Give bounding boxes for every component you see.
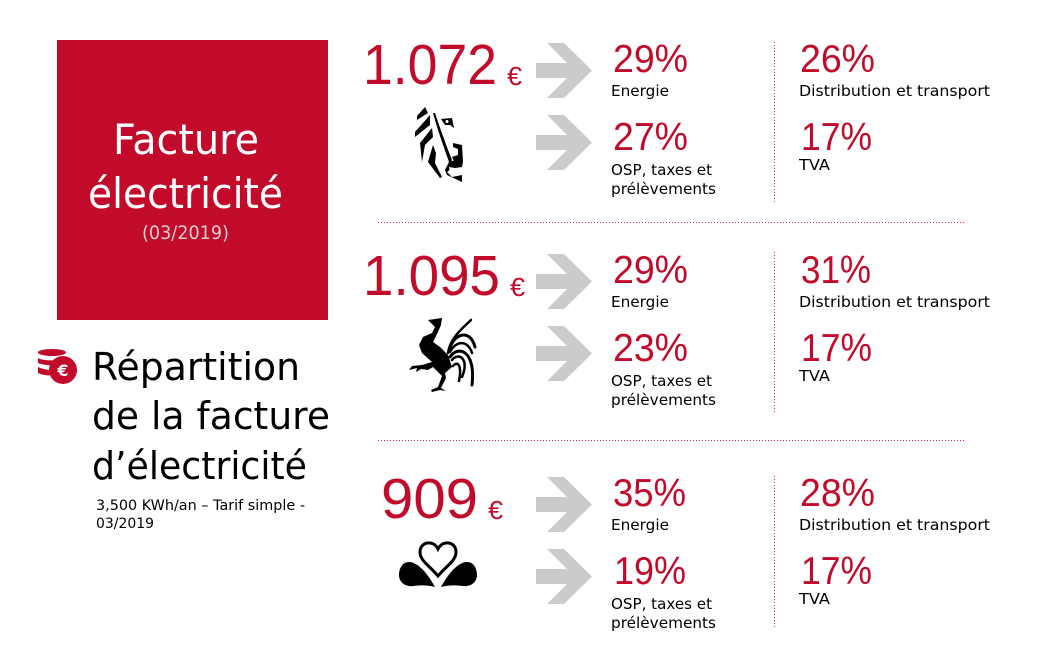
stat: Energie: 29% (613, 38, 688, 81)
stat: OSP taxes: prélèvements (611, 180, 716, 198)
stat: OSP taxes: 19% (614, 550, 686, 593)
stat: Distribution (799, 249, 990, 311)
panel: title box (57, 40, 328, 320)
stat: Energie (611, 38, 688, 100)
stat: Distribution: 28% (800, 472, 875, 515)
arrow (536, 549, 592, 604)
stat: TVA (798, 116, 872, 174)
icon: Brussels heart and drops (399, 543, 477, 587)
icon: Flemish lion (415, 107, 463, 182)
arrow (536, 477, 592, 532)
total: 1.095 euros: 1.095 (363, 244, 500, 308)
panel: Wallonia (363, 244, 990, 414)
stat: TVA: TVA (798, 156, 831, 174)
stat: Energie: Energie (611, 516, 669, 534)
stat: OSP taxes: OSP, taxes et (611, 161, 712, 179)
stat: TVA (798, 550, 872, 608)
stat: Energie (611, 472, 686, 534)
stat: TVA: 17% (801, 327, 872, 370)
subheading: consumption note (96, 498, 305, 532)
stat: OSP taxes (611, 327, 716, 409)
title: Facture électricité: électricité (88, 169, 283, 218)
stat: TVA (798, 327, 872, 385)
stat: Energie: Energie (611, 82, 669, 100)
total: 1.072 euros: 1.072 (363, 33, 497, 97)
stat: OSP taxes: OSP, taxes et (611, 595, 712, 613)
title: Facture électricité (88, 115, 283, 218)
total: 909 euros: 909 (381, 467, 478, 531)
stat: TVA: TVA (798, 367, 831, 385)
arrow (536, 115, 592, 170)
heading: Répartition de la facture d'électricité: de la facture (92, 394, 330, 438)
stat: OSP taxes: OSP, taxes et (611, 372, 712, 390)
stat: Distribution (799, 472, 990, 534)
subheading: consumption note: 3,500 KWh/an – Tarif simple - (96, 498, 305, 514)
stat: TVA: 17% (801, 550, 872, 593)
stat: Energie (611, 249, 688, 311)
total: 909 euros: € (488, 495, 504, 525)
stat: OSP taxes (611, 550, 716, 632)
arrow (536, 326, 592, 381)
stat: Energie: Energie (611, 293, 669, 311)
stat: Distribution: Distribution et transport (799, 82, 990, 100)
stat: OSP taxes: prélèvements (611, 391, 716, 409)
heading: Répartition de la facture d'électricité: d’électricité (92, 444, 307, 488)
stat: OSP taxes: 27% (613, 116, 688, 159)
stat: Energie: 35% (613, 472, 686, 515)
subheading: consumption note: 03/2019 (96, 516, 154, 532)
stat: Distribution: 31% (801, 249, 871, 292)
stat: Distribution: Distribution et transport (799, 516, 990, 534)
stat: TVA: 17% (801, 116, 872, 159)
heading: Répartition de la facture d'électricité: Répartition (92, 345, 300, 389)
total: 1.095 euros: € (510, 272, 526, 302)
stat: Energie: 29% (613, 249, 688, 292)
heading: Répartition de la facture d'électricité (92, 345, 330, 488)
arrow (536, 43, 592, 98)
date: 03/2019: (03/2019) (142, 222, 229, 244)
title: Facture électricité: Facture (113, 115, 259, 164)
stat: OSP taxes: prélèvements (611, 614, 716, 632)
icon: Walloon rooster (409, 318, 475, 392)
arrow (536, 254, 592, 309)
stat: OSP taxes: 23% (613, 327, 688, 370)
stat: Distribution: Distribution et transport (799, 293, 990, 311)
total: 1.072 euros: € (507, 61, 523, 91)
stat: TVA: TVA (798, 590, 831, 608)
panel: Brussels (381, 467, 990, 632)
stat: Distribution (799, 38, 990, 100)
stat: Distribution: 26% (800, 38, 875, 81)
panel: Flanders (363, 33, 990, 203)
icon: coins with euro (38, 349, 77, 384)
icon: coins with euro: € (56, 361, 69, 380)
stat: OSP taxes (611, 116, 716, 198)
